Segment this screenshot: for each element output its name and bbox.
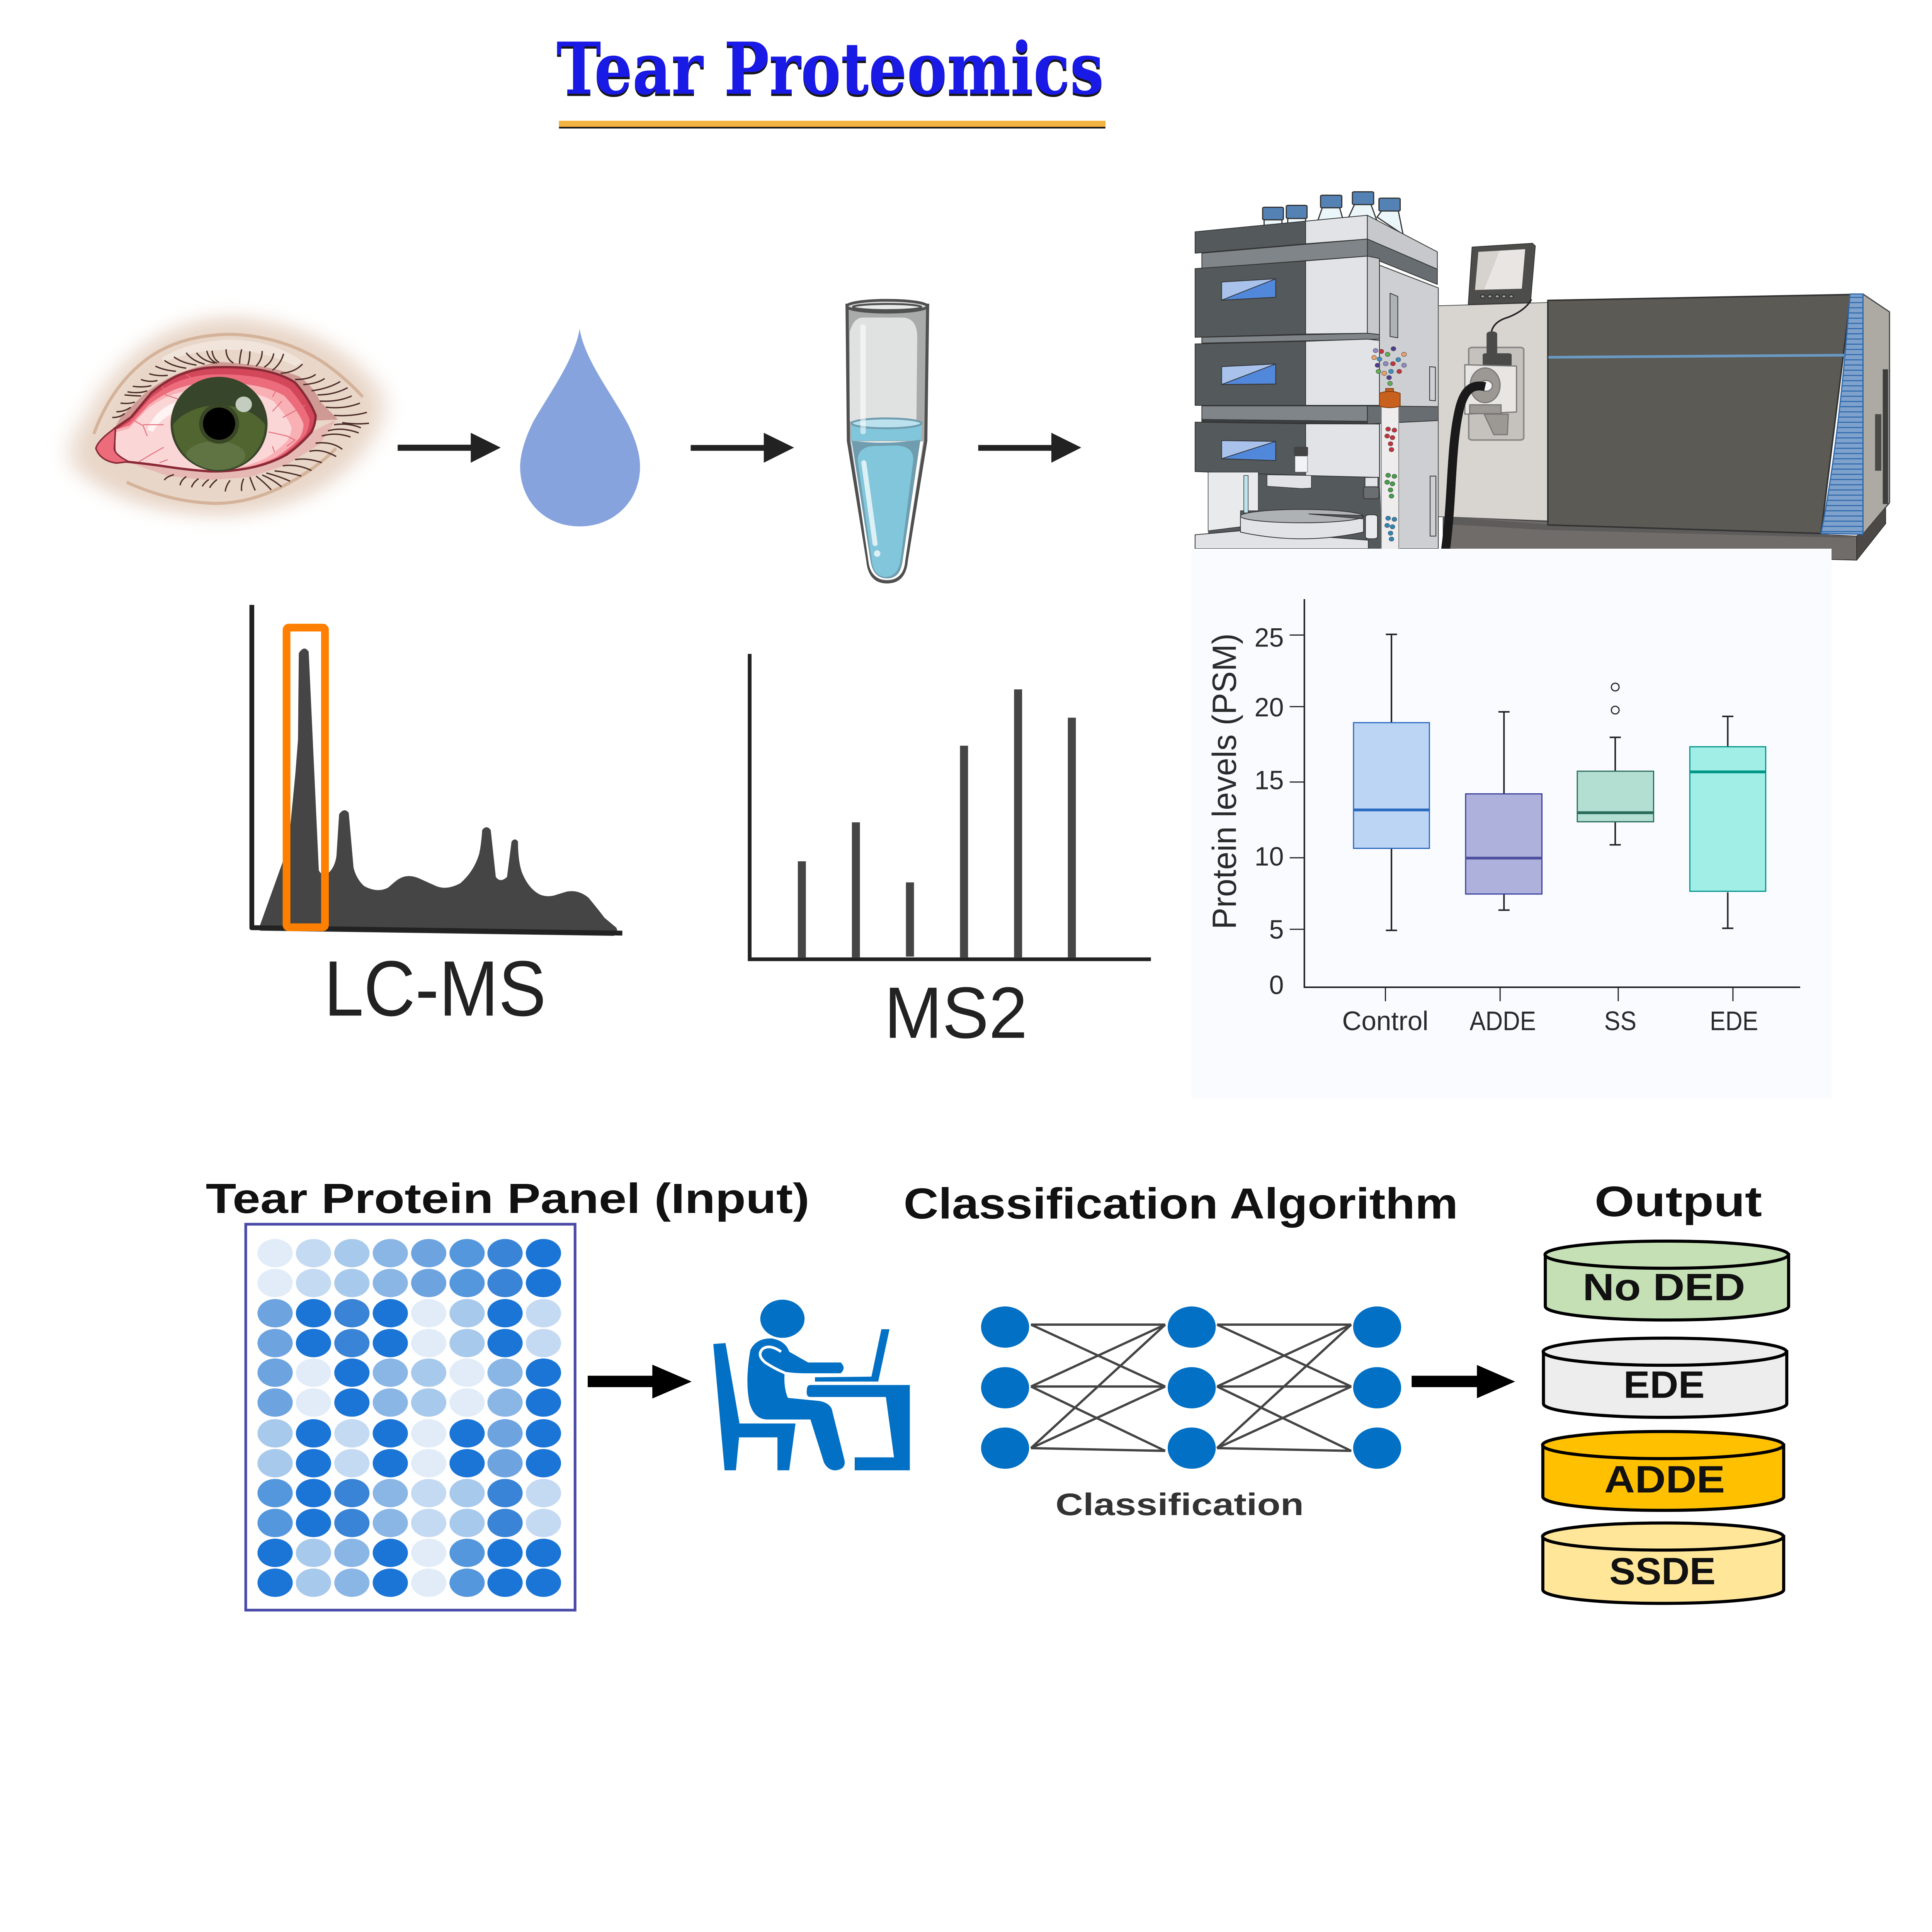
tube rim inner <box>853 304 921 310</box>
heading: output: Output <box>1595 1178 1762 1226</box>
outlier <box>1611 683 1619 691</box>
panel: boxplot <box>1191 549 1832 1098</box>
lower crease <box>127 448 336 503</box>
y axis title: Protein levels (PSM) <box>1205 633 1243 929</box>
source housing <box>1465 365 1517 435</box>
output: ADDE <box>1543 1432 1784 1510</box>
LC-MS label: LC-MS <box>324 945 546 1032</box>
y axis tick labels: 0 <box>1269 971 1284 1000</box>
upper lid band <box>114 362 338 438</box>
sclera outer rim <box>116 368 315 461</box>
lid highlight <box>162 339 303 366</box>
thin cable <box>1492 299 1531 332</box>
caruncle <box>96 428 129 463</box>
network links <box>1031 1325 1351 1451</box>
solvent bottles <box>1263 192 1403 235</box>
tube light area <box>850 318 917 421</box>
eye skin glow <box>71 317 383 516</box>
heatmap frame <box>246 1224 575 1610</box>
liquid lower <box>858 446 913 577</box>
small vial <box>1294 447 1308 472</box>
arrow: tube to instrument <box>978 433 1081 463</box>
analyst body <box>747 1338 845 1470</box>
classification caption: Classification <box>1056 1487 1304 1522</box>
arrow: eye to drop <box>398 433 501 463</box>
box: ADDE <box>1466 712 1542 910</box>
upper crease <box>94 334 363 434</box>
desk <box>807 1385 910 1470</box>
sclera pale <box>96 389 291 471</box>
liquid lower edge <box>852 440 920 578</box>
box: SS <box>1577 683 1654 845</box>
panel: LC-MS chromatogram <box>250 605 622 1032</box>
chair <box>713 1343 796 1470</box>
arrow: heatmap to analyst <box>588 1365 692 1398</box>
liquid surface <box>852 418 922 428</box>
chromatogram axes <box>250 605 622 935</box>
lower compartment <box>1208 472 1383 549</box>
monitor <box>1468 243 1535 305</box>
eyelid outline <box>114 367 316 471</box>
x axis labels: EDE <box>1710 1006 1758 1036</box>
title underline <box>559 121 1105 128</box>
highlight lower <box>861 460 878 546</box>
arm outline <box>760 1347 786 1373</box>
MS2 peaks <box>798 689 1076 957</box>
mass spec front <box>1548 294 1851 534</box>
mass spec right side <box>1863 294 1889 534</box>
orange selection box <box>287 628 325 927</box>
side panel slots <box>1390 293 1436 536</box>
heatmap dots <box>257 1239 561 1597</box>
box: Control <box>1354 634 1429 930</box>
y axis tick labels: 15 <box>1254 766 1284 795</box>
boxplot axes <box>1290 599 1800 1001</box>
sclera <box>116 368 315 470</box>
highlight dot <box>874 550 880 557</box>
tube rim <box>847 300 927 312</box>
heading: tear protein panel: Tear Protein Panel (Input) <box>206 1175 810 1222</box>
front stripe <box>1548 354 1847 359</box>
boxplot background <box>1191 549 1832 1098</box>
output: EDE: EDE <box>1624 1364 1705 1406</box>
laptop <box>815 1329 889 1382</box>
title: Tear Proteomics <box>556 29 1104 113</box>
output: ADDE: ADDE <box>1604 1458 1725 1501</box>
title: Tear Proteomics <box>556 27 1104 111</box>
neural network <box>981 1306 1401 1469</box>
LC column <box>1379 388 1400 549</box>
output: No DED <box>1545 1241 1789 1320</box>
y axis tick labels: 20 <box>1254 693 1284 722</box>
module 1 <box>1195 256 1379 343</box>
MS2 label: MS2 <box>884 972 1027 1053</box>
iris reflection <box>235 396 252 412</box>
arrow: drop to tube <box>691 433 794 463</box>
tube white lower background <box>851 441 923 580</box>
y axis tick labels: 25 <box>1254 623 1284 652</box>
x axis labels <box>1342 1006 1758 1036</box>
icon: analyst at laptop <box>713 1300 910 1470</box>
tube glass <box>847 305 928 582</box>
autosampler slats <box>1208 472 1311 531</box>
liquid upper <box>851 423 922 441</box>
icon: sample tube <box>847 300 928 582</box>
panel: protein heatmap <box>246 1224 575 1610</box>
x axis labels: Control <box>1342 1006 1429 1036</box>
chromatogram area <box>260 648 617 936</box>
blue vent strip <box>1821 294 1863 534</box>
upper lashes <box>112 349 369 424</box>
panel: MS2 spectrum <box>748 654 1151 1053</box>
mass spec side vents <box>1875 369 1888 504</box>
box: EDE <box>1690 716 1766 928</box>
output: SSDE: SSDE <box>1609 1550 1716 1592</box>
y axis tick labels <box>1254 623 1284 1000</box>
veins <box>129 374 305 463</box>
lower lashes <box>165 424 361 492</box>
iris lower <box>168 405 270 475</box>
analyst head <box>760 1300 804 1338</box>
output: SSDE <box>1543 1523 1784 1604</box>
MS2 axes <box>748 654 1151 961</box>
heading: classification algorithm: Classification Algorithm <box>903 1179 1458 1228</box>
mass spec base <box>1443 508 1886 560</box>
y axis tick labels: 5 <box>1269 915 1284 944</box>
iris light <box>186 441 245 470</box>
highlight upper <box>861 324 866 434</box>
sclera band <box>114 374 310 471</box>
arrow: network to output <box>1412 1365 1515 1398</box>
icon: LC-MS instrument <box>1195 192 1889 560</box>
module 3 <box>1195 422 1379 478</box>
sclera pink <box>95 383 303 471</box>
x axis labels: ADDE <box>1469 1006 1536 1036</box>
ion source body <box>1438 303 1548 521</box>
icon: red dry eye <box>71 317 383 516</box>
black spray cable <box>1446 386 1485 549</box>
x axis labels: SS <box>1604 1006 1636 1036</box>
side panel <box>1379 265 1438 549</box>
probe <box>1483 332 1512 366</box>
iris <box>171 377 267 471</box>
sclera shine <box>147 402 182 432</box>
y axis tick labels: 10 <box>1254 842 1284 871</box>
peptide dots <box>1372 347 1406 541</box>
lower lid band <box>127 420 336 480</box>
sample carousel <box>1195 478 1379 549</box>
output: EDE <box>1543 1338 1787 1417</box>
network nodes <box>981 1306 1401 1469</box>
module 2 <box>1195 339 1438 424</box>
icon: tear drop <box>520 329 640 526</box>
output: No DED: No DED <box>1583 1266 1745 1308</box>
pupil <box>201 406 237 442</box>
ion source plate <box>1469 347 1524 440</box>
outlier <box>1611 706 1619 714</box>
top module <box>1195 215 1437 284</box>
